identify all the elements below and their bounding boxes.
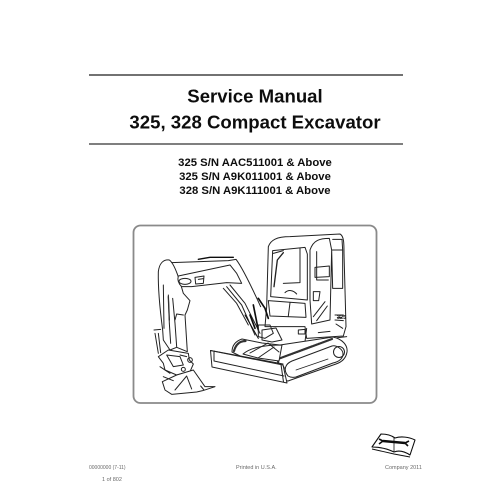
crawler track xyxy=(232,328,347,381)
footer: 1 of 802 xyxy=(102,477,122,483)
title xyxy=(129,86,381,132)
hydraulic hoses xyxy=(250,298,268,330)
serial numbers xyxy=(178,157,332,197)
title: Service Manual xyxy=(187,86,323,106)
excavator arm and bucket xyxy=(154,257,261,394)
excavator illustration xyxy=(154,234,347,394)
footer xyxy=(89,465,422,483)
serial numbers: 325 S/N A9K011001 & Above xyxy=(179,171,331,183)
serial numbers: 328 S/N A9K111001 & Above xyxy=(179,185,331,197)
footer: Company 2011 xyxy=(385,465,422,471)
footer: 00000000 (7-11) xyxy=(89,465,126,471)
footer: Printed in U.S.A. xyxy=(236,465,277,471)
dozer blade xyxy=(210,350,287,383)
illustration frame xyxy=(134,226,376,403)
title: 325, 328 Compact Excavator xyxy=(129,112,381,132)
manual and wrench logo xyxy=(372,434,415,457)
model label: 325 xyxy=(337,315,346,321)
excavator cab xyxy=(250,234,347,342)
serial numbers: 325 S/N AAC511001 & Above xyxy=(178,157,332,169)
undercarriage xyxy=(243,345,282,361)
